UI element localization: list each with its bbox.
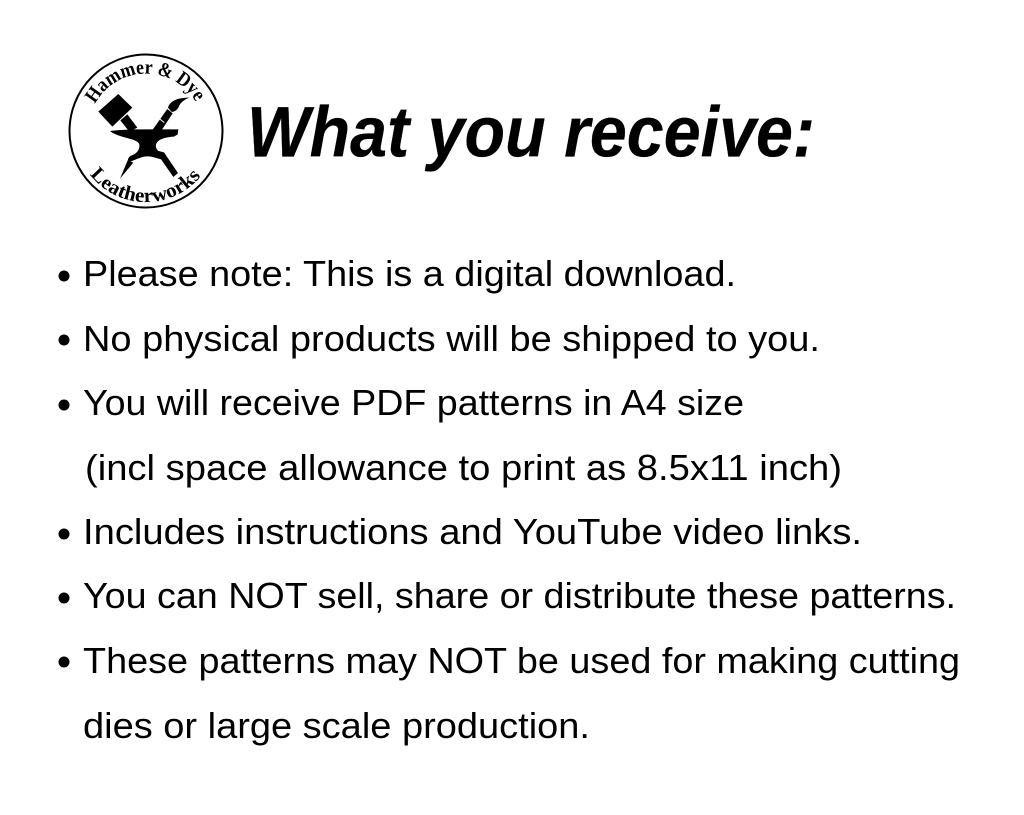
bullet: PDF patterns: You will receive PDF patterns in A4 size <box>83 382 744 423</box>
icon: paint brush <box>120 98 190 179</box>
logo curved text bottom: Leatherworks <box>90 166 200 202</box>
title: What you receive: <box>247 94 815 172</box>
logo ring <box>70 54 222 208</box>
bullet: instructions and video links: Includes instructions and YouTube video links. <box>83 511 862 552</box>
bullet list <box>58 253 960 746</box>
bullet: no physical products: No physical products will be shipped to you. <box>83 318 820 359</box>
bullet: no selling or sharing: You can NOT sell, share or distribute these patterns. <box>83 575 956 616</box>
icon: hammer <box>98 94 178 177</box>
logo curved text top: Hammer & Dye <box>84 63 202 104</box>
bullet: no cutting dies <box>58 640 960 746</box>
bullet: digital download: Please note: This is a digital download. <box>83 253 736 294</box>
bullet: PDF patterns: (incl space allowance to print as 8.5x11 inch) <box>85 447 842 488</box>
logo: Hammer & Dye Leatherworks <box>68 54 224 208</box>
bullet: no cutting dies: dies or large scale production. <box>83 705 590 746</box>
icon group: hammer, brush and anvil <box>98 94 190 179</box>
bullet: no cutting dies: These patterns may NOT be used for making cutting <box>83 640 960 681</box>
icon: anvil <box>110 129 178 162</box>
bullet: PDF patterns <box>58 382 842 488</box>
